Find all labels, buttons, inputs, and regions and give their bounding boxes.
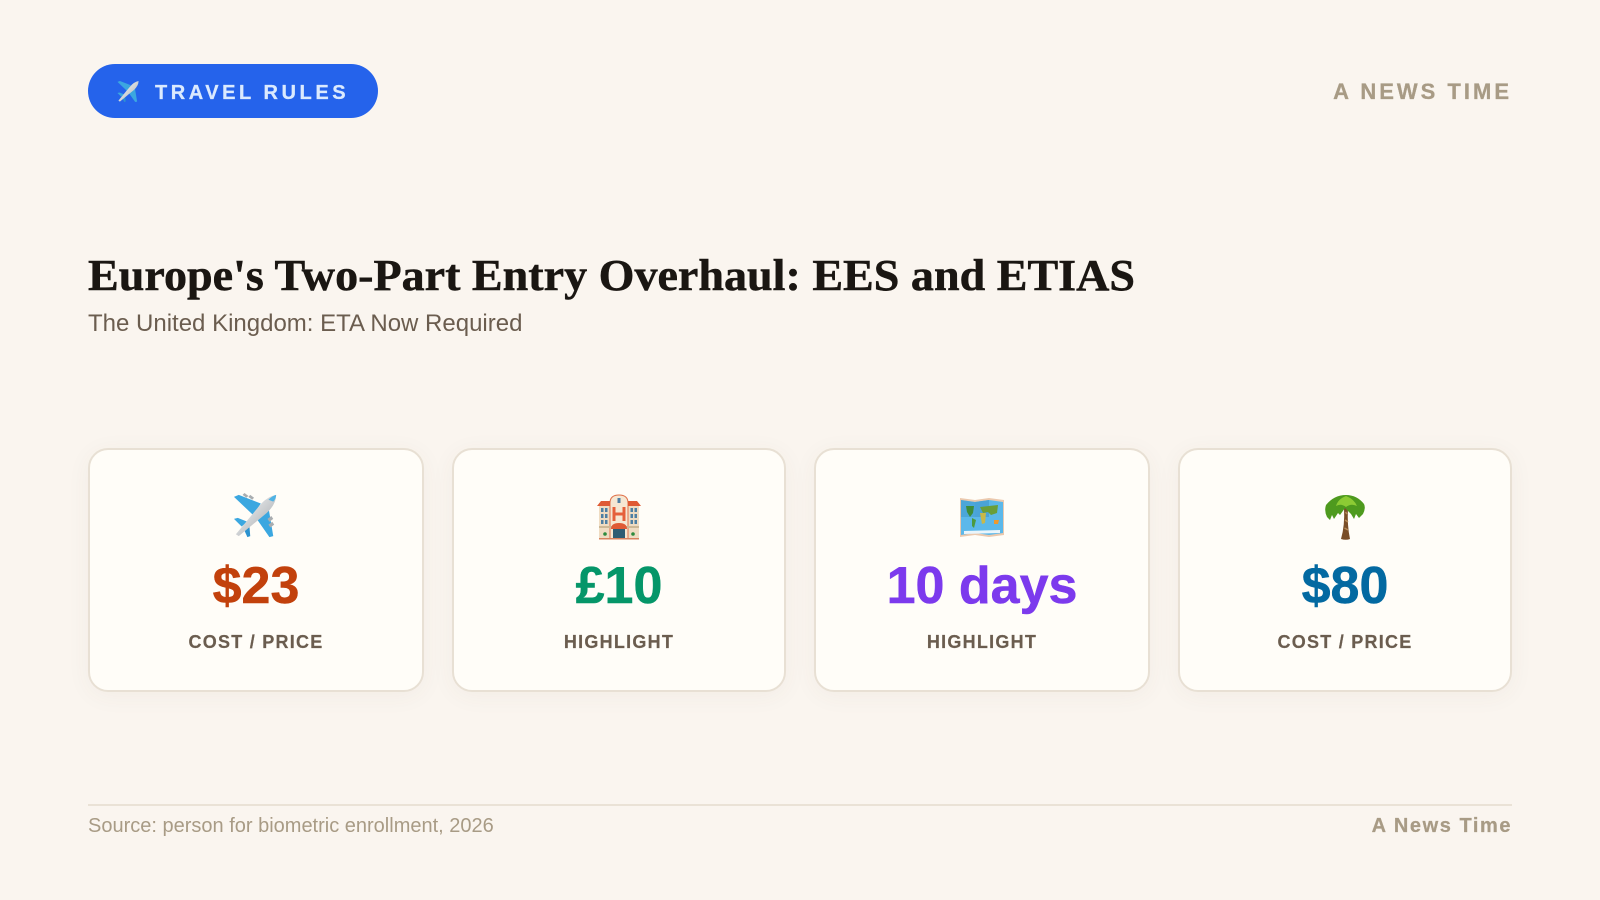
subtitle: The United Kingdom: ETA Now Required	[88, 310, 522, 337]
icon: airplane	[234, 493, 276, 538]
panel: stat card £10	[452, 448, 786, 692]
pill label: TRAVEL RULES	[155, 82, 349, 104]
label: HIGHLIGHT	[927, 632, 1037, 652]
icon: airplane	[118, 81, 139, 102]
label: COST / PRICE	[188, 632, 324, 652]
value: $80	[1302, 557, 1388, 615]
footer brand: A News Time	[1372, 815, 1512, 837]
icon: palm tree	[1325, 495, 1365, 540]
panel: stat card $80	[1178, 448, 1512, 692]
source note: Source: person for biometric enrollment, 2026	[88, 815, 494, 837]
label: HIGHLIGHT	[564, 632, 674, 652]
panel: stat card 10 days	[814, 448, 1150, 692]
title: Europe's Two-Part Entry Overhaul: EES and ETIAS	[88, 251, 1135, 300]
icon: world map	[960, 498, 1004, 537]
brand name: A NEWS TIME	[1333, 79, 1512, 104]
value: 10 days	[887, 557, 1077, 615]
category pill	[88, 64, 378, 118]
label: COST / PRICE	[1277, 632, 1412, 652]
footer	[88, 804, 1512, 837]
value: £10	[576, 557, 662, 615]
value: $23	[213, 557, 299, 615]
icon: hotel	[597, 494, 641, 540]
panel: stat card $23	[88, 448, 424, 692]
